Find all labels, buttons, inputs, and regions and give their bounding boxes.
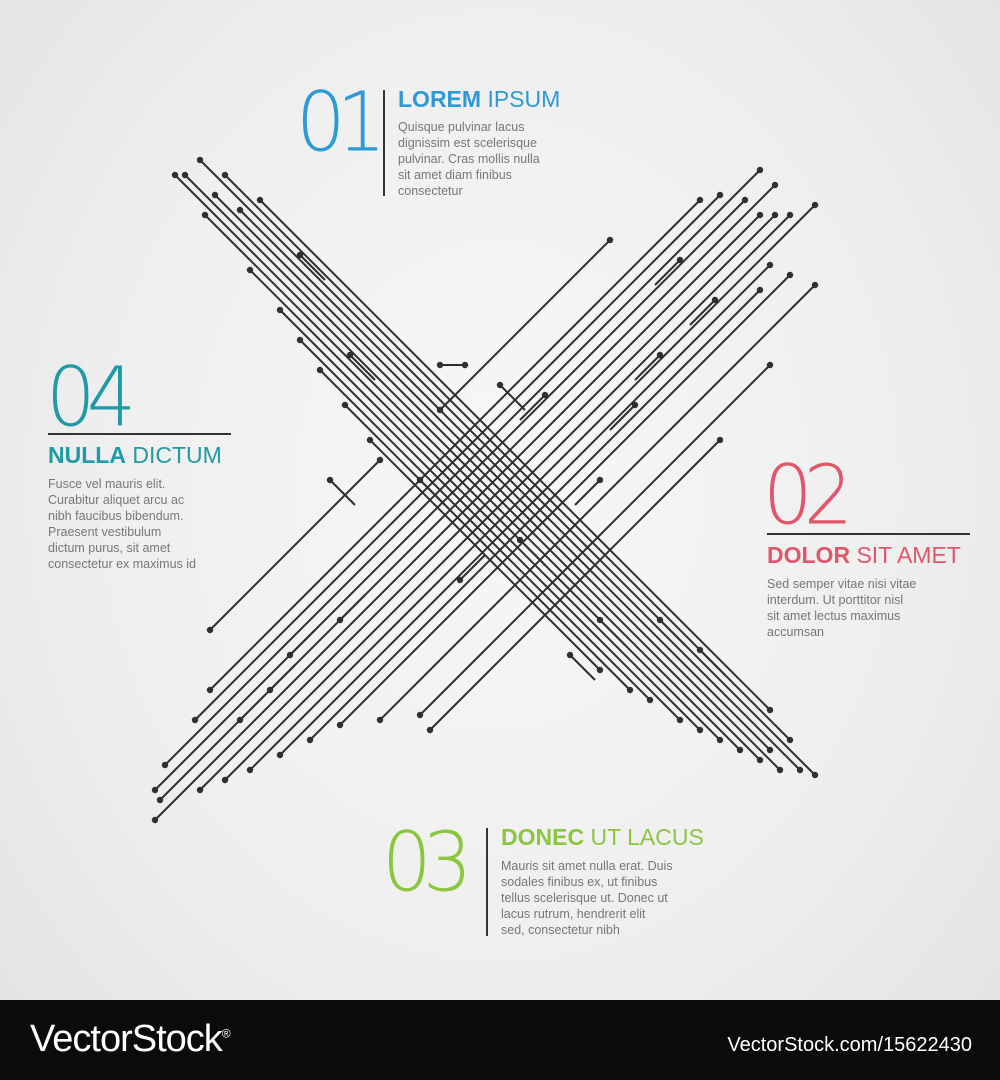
text 02	[767, 577, 916, 639]
text 02: interdum. Ut porttitor nisl	[767, 593, 903, 607]
number 04: 04	[46, 351, 127, 445]
text 02: accumsan	[767, 625, 824, 639]
block 01	[296, 76, 560, 198]
footer id: VectorStock.com/15622430	[727, 1034, 972, 1056]
text 04	[48, 477, 196, 571]
text 01: consectetur	[398, 184, 463, 198]
text 01: dignissim est scelerisque	[398, 136, 537, 150]
number 01: 01	[296, 76, 377, 170]
text 03: lacus rutrum, hendrerit elit	[501, 907, 646, 921]
slash band traces	[155, 170, 815, 820]
block 02	[763, 449, 970, 639]
text 03: Mauris sit amet nulla erat. Duis	[501, 859, 673, 873]
heading 01: LOREM IPSUM	[398, 86, 560, 112]
heading 02: DOLOR SIT AMET	[767, 542, 961, 568]
text 04: dictum purus, sit amet	[48, 541, 170, 555]
number 02: 02	[763, 449, 844, 543]
number 03: 03	[382, 816, 463, 910]
text 04: consectetur ex maximus id	[48, 557, 196, 571]
heading 04: NULLA DICTUM	[48, 442, 222, 468]
footer bar	[0, 1000, 1000, 1080]
text 04: Fusce vel mauris elit.	[48, 477, 165, 491]
text 03	[501, 859, 673, 937]
divider 01	[383, 90, 385, 196]
heading 03: DONEC UT LACUS	[501, 824, 704, 850]
block 03	[382, 816, 704, 937]
text 04: Praesent vestibulum	[48, 525, 161, 539]
divider 03	[486, 828, 488, 936]
text 02: sit amet lectus maximus	[767, 609, 900, 623]
text 01	[398, 120, 540, 198]
text 04: Curabitur aliquet arcu ac	[48, 493, 184, 507]
backslash band traces	[175, 160, 815, 775]
text 01: pulvinar. Cras mollis nulla	[398, 152, 540, 166]
text 02: Sed semper vitae nisi vitae	[767, 577, 916, 591]
divider 04	[48, 433, 231, 435]
text 03: sodales finibus ex, ut finibus	[501, 875, 657, 889]
text 01: sit amet diam finibus	[398, 168, 512, 182]
trace end dots	[152, 157, 818, 823]
text 03: sed, consectetur nibh	[501, 923, 620, 937]
trace stubs	[240, 255, 725, 720]
text 01: Quisque pulvinar lacus	[398, 120, 524, 134]
divider 02	[767, 533, 970, 535]
block 04	[46, 351, 231, 571]
footer logo: VectorStock®	[30, 1018, 230, 1060]
text 04: nibh faucibus bibendum.	[48, 509, 184, 523]
text 03: tellus scelerisque ut. Donec ut	[501, 891, 668, 905]
